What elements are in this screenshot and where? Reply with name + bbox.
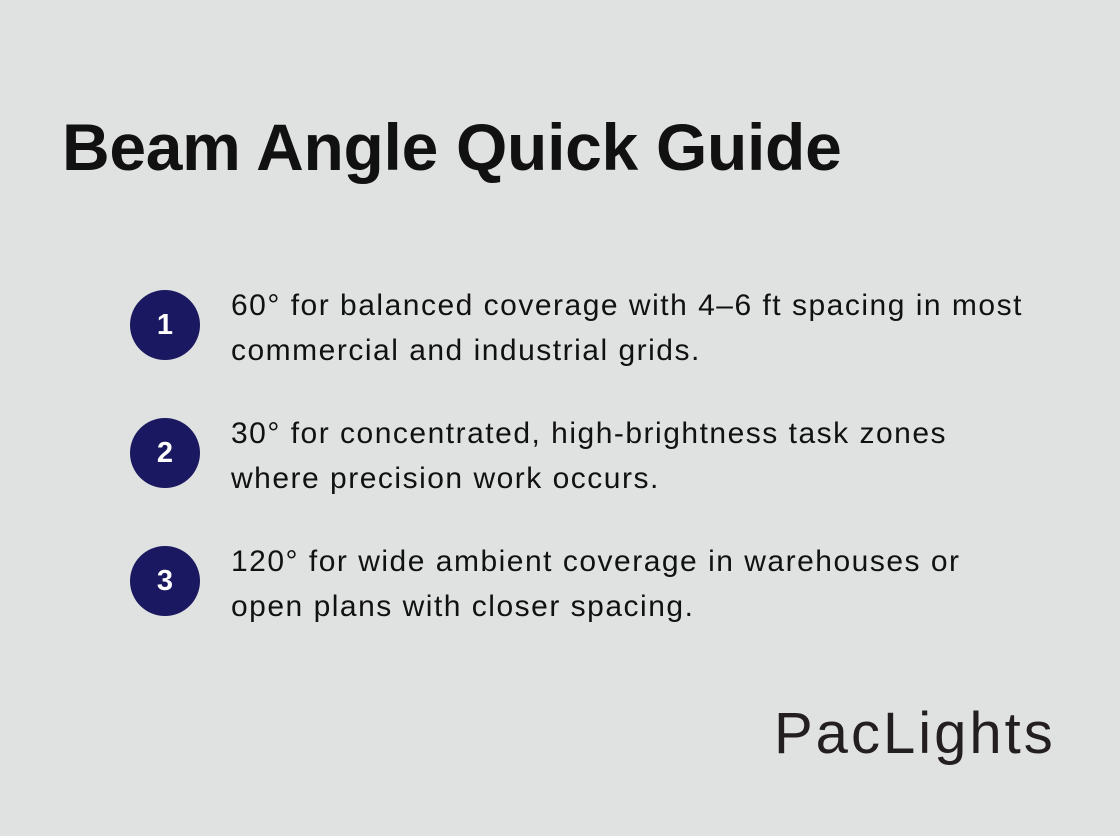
item 1 bbox=[130, 289, 1023, 367]
badge 1: 1 bbox=[157, 309, 173, 341]
text 1: 60° for balanced coverage with 4–6 ft spacing in most bbox=[231, 289, 1023, 322]
text 2: 30° for concentrated, high-brightness task zones bbox=[231, 417, 947, 450]
badge 1 bbox=[130, 290, 200, 360]
badge 2: 2 bbox=[157, 437, 173, 469]
badge 3: 3 bbox=[157, 565, 173, 597]
text 3: open plans with closer spacing. bbox=[231, 590, 694, 623]
item 2 bbox=[130, 417, 947, 495]
item 3 bbox=[130, 545, 961, 623]
title: Beam Angle Quick Guide bbox=[62, 110, 841, 184]
text 1: commercial and industrial grids. bbox=[231, 334, 701, 367]
badge 2 bbox=[130, 418, 200, 488]
text 3: 120° for wide ambient coverage in warehouses or bbox=[231, 545, 961, 578]
text 2 bbox=[231, 417, 947, 495]
badge 3 bbox=[130, 546, 200, 616]
text 3 bbox=[231, 545, 961, 623]
logo: PacLights bbox=[774, 701, 1056, 766]
text 1 bbox=[231, 289, 1023, 367]
text 2: where precision work occurs. bbox=[231, 462, 660, 495]
